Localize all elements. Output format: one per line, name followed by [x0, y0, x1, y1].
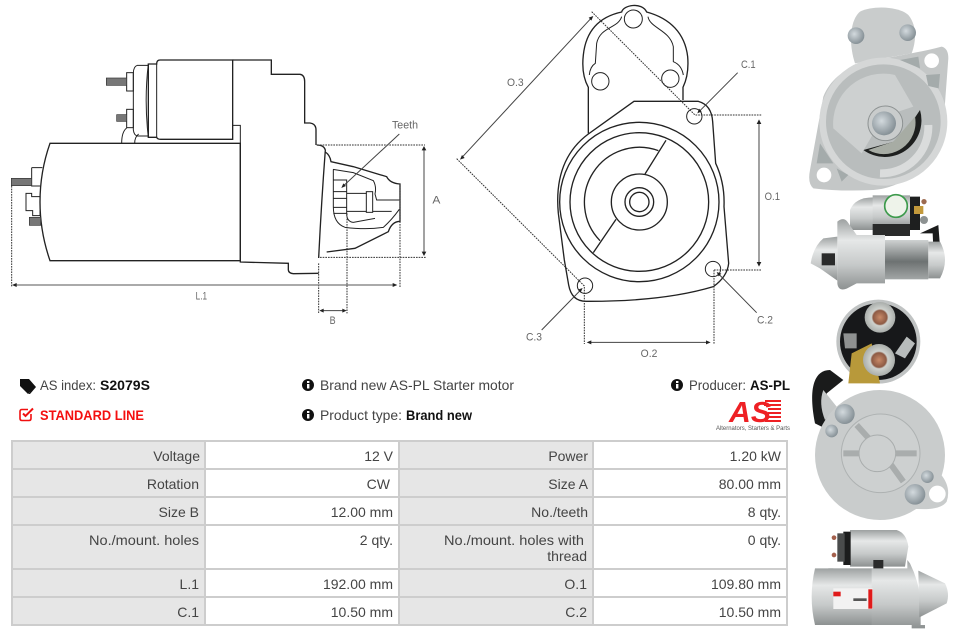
info: AS index: S2079S: [100, 377, 150, 393]
table row: mounting holes: thread: [547, 548, 587, 564]
solenoid outline: [106, 60, 316, 145]
table row: C.1, C.2: [177, 604, 781, 620]
icon: tags: [20, 379, 36, 394]
dimension lines: A, B, L.1, Teeth: B: [330, 315, 336, 327]
dimension lines: O.1, O.2, O.3, C.1, C.2, C.3: C.2: [757, 315, 773, 327]
table row: voltage, power: 12 V: [364, 448, 394, 464]
table row: size B, teeth: 8 qty.: [748, 504, 781, 520]
table row: L.1, O.1: [180, 576, 781, 592]
table row: C.1, C.2: 10.50 mm: [719, 604, 781, 620]
dimension lines: O.1, O.2, O.3, C.1, C.2, C.3: [457, 12, 780, 360]
table row: C.1, C.2: C.1: [177, 604, 199, 620]
table row: mounting holes: No./mount. holes: [89, 532, 199, 548]
table row: rotation, size A: Rotation: [147, 476, 199, 492]
table row: L.1, O.1: O.1: [564, 576, 587, 592]
flange and ear outline: [558, 5, 729, 301]
table row: C.1, C.2: C.2: [565, 604, 587, 620]
front view technical drawing: [457, 5, 780, 360]
dimension lines: O.1, O.2, O.3, C.1, C.2, C.3: C.3: [526, 331, 542, 343]
info: product type: Brand new: [406, 407, 472, 423]
table row: size B, teeth: No./teeth: [531, 504, 588, 520]
logo: AS-PL: Alternators, Starters & Parts: [716, 426, 790, 432]
photo: side view, drive end right: [812, 530, 948, 628]
table row: voltage, power: Voltage: [153, 448, 200, 464]
dimension lines: A, B, L.1, Teeth: L.1: [196, 290, 207, 302]
dimension lines: O.1, O.2, O.3, C.1, C.2, C.3: C.1: [741, 59, 756, 71]
drive nose with pinion: [317, 145, 400, 258]
specification table: [11, 440, 787, 626]
info: AS index: [20, 377, 150, 394]
icon: info: [302, 409, 314, 421]
table row: rotation, size A: [147, 476, 781, 492]
table row: L.1, O.1: 109.80 mm: [711, 576, 781, 592]
label column backgrounds: [11, 440, 593, 626]
photo: rear and solenoid view: [812, 300, 948, 520]
info: producer: [671, 377, 790, 393]
photo: front flange view: [809, 8, 948, 191]
dimension lines: A, B, L.1, Teeth: A: [432, 195, 441, 207]
table row: voltage, power: Power: [548, 448, 588, 464]
icon: info: [671, 379, 683, 391]
dimension lines: A, B, L.1, Teeth: [12, 120, 441, 327]
side view technical drawing: [11, 60, 441, 327]
table row: mounting holes: No./mount. holes with: [444, 532, 584, 548]
table row: mounting holes: 2 qty.: [360, 532, 393, 548]
info: producer: AS-PL: [750, 377, 790, 393]
info: AS index: AS index:: [40, 377, 96, 393]
table row: rotation, size A: 80.00 mm: [719, 476, 781, 492]
info: standard line: STANDARD LINE: [40, 407, 144, 423]
info: product type: [302, 407, 472, 423]
table row: size B, teeth: 12.00 mm: [331, 504, 393, 520]
table row: L.1, O.1: L.1: [180, 576, 199, 592]
icon: info: [302, 379, 314, 391]
table row: mounting holes: [89, 532, 781, 564]
table row: size B, teeth: [159, 504, 781, 520]
housing rings and shaft: [560, 122, 719, 282]
dimension lines: O.1, O.2, O.3, C.1, C.2, C.3: O.2: [641, 348, 657, 360]
table row: rotation, size A: Size A: [548, 476, 589, 492]
logo: AS-PL: AS: [728, 397, 772, 429]
info: producer: Producer:: [689, 377, 746, 393]
icon: checked box: [20, 408, 33, 420]
table row: voltage, power: 1.20 kW: [730, 448, 782, 464]
table row: L.1, O.1: 192.00 mm: [323, 576, 393, 592]
table row: C.1, C.2: 10.50 mm: [331, 604, 393, 620]
dimension lines: A, B, L.1, Teeth: Teeth: [392, 120, 418, 132]
dimension lines: O.1, O.2, O.3, C.1, C.2, C.3: O.3: [507, 77, 524, 89]
logo: AS-PL: [716, 397, 790, 432]
dimension lines: O.1, O.2, O.3, C.1, C.2, C.3: O.1: [765, 191, 780, 203]
table row: rotation, size A: CW: [367, 476, 391, 492]
info: brand new starter motor: Brand new AS-PL Starter motor: [320, 377, 514, 393]
photo: side view, drive end left: [811, 195, 945, 289]
info: product type: Product type:: [320, 407, 402, 423]
motor body outline: [11, 143, 319, 274]
table row: mounting holes: 0 qty.: [748, 532, 781, 548]
table row: size B, teeth: Size B: [159, 504, 199, 520]
table row: voltage, power: [153, 448, 782, 464]
